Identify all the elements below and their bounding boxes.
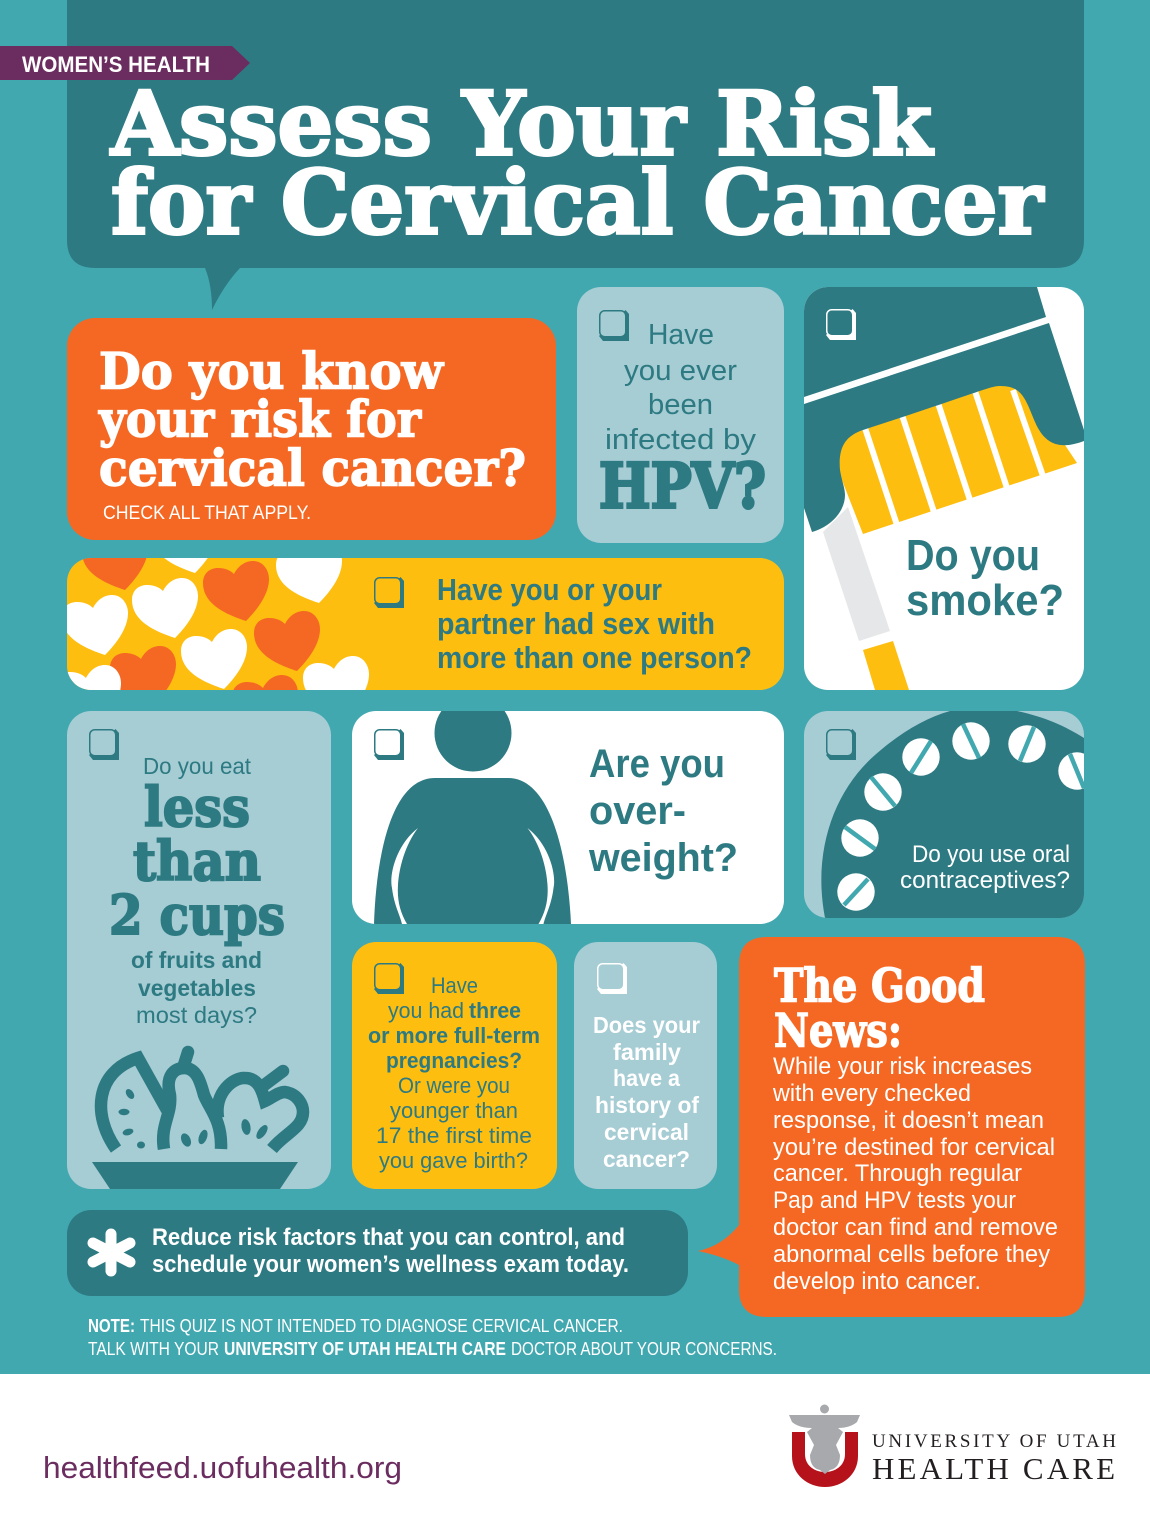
HPV question: infected by [605, 424, 757, 456]
disclaimer note: DOCTOR ABOUT YOUR CONCERNS. [511, 1339, 777, 1359]
panel: partners [67, 558, 784, 690]
logo text [872, 1431, 1116, 1486]
overweight question: Are you [589, 742, 725, 786]
HPV question: been [648, 389, 713, 421]
good news body: cancer. Through regular [773, 1160, 1022, 1187]
good news body: you’re destined for cervical [773, 1134, 1055, 1161]
pregnancies question: Have [431, 973, 478, 998]
checkbox [374, 963, 404, 994]
fruit question: less [144, 775, 250, 839]
HPV question: HPV? [599, 450, 766, 522]
panel: pregnancies [352, 942, 557, 1189]
category tag [0, 46, 250, 80]
pregnancies question: three [469, 998, 521, 1023]
checkbox [374, 577, 404, 608]
panel: family history [574, 942, 717, 1189]
HPV question: you ever [624, 355, 737, 387]
pregnancies question: Or were you [398, 1073, 510, 1098]
fruit question: vegetables [138, 975, 256, 1001]
category tag: WOMEN’S HEALTH [22, 52, 210, 77]
disclaimer note [88, 1316, 777, 1359]
fruit question: than [133, 829, 261, 893]
disclaimer note: UNIVERSITY OF UTAH HEALTH CARE [224, 1339, 506, 1359]
icon: hearts [67, 558, 369, 690]
good news body: develop into cancer. [773, 1268, 981, 1295]
good news heading: News: [774, 1004, 902, 1058]
fruit question: of fruits and [131, 947, 262, 973]
family history question: history of [595, 1092, 699, 1118]
callout: reduce risk [67, 1210, 688, 1296]
contraceptives question [900, 841, 1070, 894]
disclaimer note: THIS QUIZ IS NOT INTENDED TO DIAGNOSE CERVICAL CANCER. [140, 1316, 623, 1336]
good news body: Pap and HPV tests your [773, 1187, 1016, 1214]
intro heading [98, 342, 526, 498]
icon: asterisk [93, 1234, 130, 1271]
logo text: UNIVERSITY OF UTAH [872, 1431, 1116, 1452]
HPV question [599, 319, 766, 522]
family history question: Does your [593, 1012, 700, 1038]
fruit question: 2 cups [109, 883, 285, 947]
panel: smoking [804, 287, 1084, 690]
callout text: Reduce risk factors that you can control, and [152, 1224, 625, 1251]
family history question: cancer? [603, 1146, 690, 1172]
callout text [152, 1224, 629, 1278]
partners question [437, 572, 752, 675]
family history question: family [613, 1039, 681, 1065]
intro heading: your risk for [98, 390, 422, 448]
logo: university of utah health care [789, 1404, 1116, 1487]
checkbox [599, 310, 629, 341]
intro instruction: CHECK ALL THAT APPLY. [103, 503, 311, 524]
good news body: with every checked [772, 1080, 971, 1107]
partners question: more than one person? [437, 640, 752, 675]
icon: caduceus u [789, 1404, 860, 1487]
fruit question: Do you eat [143, 753, 252, 779]
icon: person [374, 694, 571, 924]
family history question: have a [613, 1065, 680, 1091]
logo text: HEALTH CARE [872, 1451, 1115, 1486]
pregnancies question: you had [388, 998, 464, 1023]
checkbox [89, 729, 119, 760]
smoking question: Do you [906, 531, 1040, 580]
panel: intro question [67, 318, 556, 540]
title text: Assess Your Risk [110, 72, 934, 176]
HPV question: Have [648, 319, 714, 351]
contraceptives question: Do you use oral [912, 841, 1070, 868]
partners question: partner had sex with [437, 606, 715, 641]
pregnancies question: 17 the first time [376, 1123, 532, 1148]
pregnancies question: or more full-term [368, 1023, 540, 1048]
title banner [67, 0, 1084, 310]
smoking question: smoke? [906, 576, 1064, 625]
fruit question [109, 753, 285, 1028]
panel: oral contraceptives [804, 711, 1096, 918]
good news body: response, it doesn’t mean [773, 1107, 1044, 1134]
checkbox [826, 309, 856, 340]
pregnancies question: pregnancies? [386, 1048, 522, 1073]
fruit question: most days? [136, 1002, 257, 1028]
checkbox [374, 729, 404, 760]
overweight question: over- [589, 789, 686, 833]
intro heading: cervical cancer? [99, 438, 526, 498]
overweight question [588, 742, 738, 880]
panel: overweight [352, 694, 784, 924]
pregnancies question: you gave birth? [379, 1148, 528, 1173]
family history question [593, 1012, 700, 1172]
smoking question [906, 531, 1064, 625]
icon: cigarette [804, 287, 1084, 690]
intro heading: Do you know [99, 342, 445, 400]
pregnancies question: younger than [390, 1098, 518, 1123]
icon: fruit bowl [92, 1052, 303, 1189]
disclaimer note: NOTE: [88, 1316, 135, 1336]
overweight question: weight? [588, 836, 738, 880]
partners question: Have you or your [437, 572, 662, 607]
panel: fruits and vegetables [67, 711, 331, 1189]
footer [0, 1374, 1150, 1518]
disclaimer note: TALK WITH YOUR [88, 1339, 219, 1359]
panel: HPV [577, 287, 784, 543]
panel: the good news [698, 937, 1085, 1317]
good news heading: The Good [774, 958, 985, 1012]
family history question: cervical [604, 1119, 689, 1145]
callout text: schedule your women’s wellness exam today. [152, 1251, 629, 1278]
checkbox [826, 729, 856, 760]
title text [110, 72, 1045, 254]
pregnancies question [368, 973, 540, 1173]
good news body: abnormal cells before they [773, 1241, 1050, 1268]
contraceptives question: contraceptives? [900, 867, 1070, 894]
website url: healthfeed.uofuhealth.org [43, 1450, 402, 1485]
title text: for Cervical Cancer [111, 150, 1045, 254]
good news body [772, 1053, 1058, 1295]
good news body: doctor can find and remove [773, 1214, 1058, 1241]
icon: pill dispenser [821, 711, 1096, 918]
checkbox [597, 963, 627, 994]
good news heading [774, 958, 985, 1058]
good news body: While your risk increases [773, 1053, 1032, 1080]
